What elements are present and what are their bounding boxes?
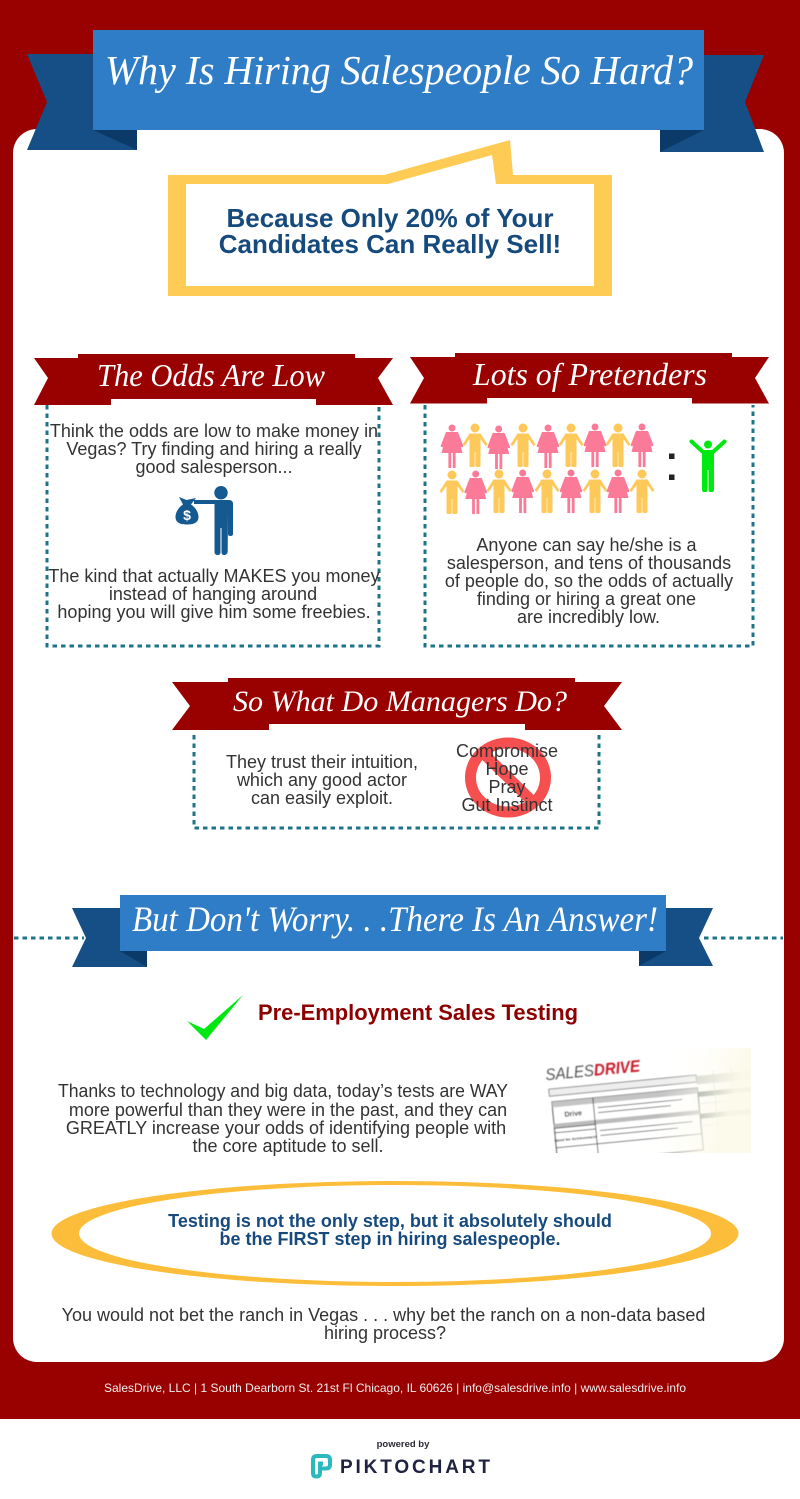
piktochart branding <box>313 1439 490 1478</box>
callout text: be the FIRST step in hiring salespeople. <box>219 1229 561 1249</box>
answer ribbon: But Don't Worry. . .There Is An Answer! <box>132 899 658 939</box>
callout: oval <box>51 1181 739 1286</box>
text block: bet the ranch: hiring process? <box>324 1323 446 1343</box>
callout text: Candidates Can Really Sell! <box>219 229 561 259</box>
colon <box>669 454 674 480</box>
text block: anyone can say: of people do, so the odds of actually <box>445 571 733 591</box>
text block: crossed out methods: Hope <box>485 759 529 779</box>
icon: green check mark <box>187 995 243 1040</box>
text block: crossed out methods: Pray <box>488 777 526 797</box>
text block: crossed out methods: Gut Instinct <box>461 795 553 815</box>
text block: intuition: can easily exploit. <box>251 788 393 808</box>
text block: technology and big data: the core aptitude to sell. <box>192 1136 384 1156</box>
icon: man holding money bag: $ <box>183 507 191 523</box>
icon: green real salesperson <box>692 440 724 492</box>
icon: prohibition sign <box>470 743 546 812</box>
heading ribbon <box>172 678 622 730</box>
text block: anyone can say: Anyone can say he/she is a <box>476 535 698 555</box>
text block: anyone can say: salesperson, and tens of thousands <box>447 553 731 573</box>
text block: anyone can say: finding or hiring a great one <box>477 589 696 609</box>
callout text: Because Only 20% of Your <box>226 203 554 233</box>
text block: bet the ranch: You would not bet the ranch in Vegas . . . why bet the ranch on a non-data based <box>62 1305 705 1325</box>
heading ribbon: So What Do Managers Do? <box>233 685 567 718</box>
heading ribbon <box>34 354 393 405</box>
text block: technology and big data: GREATLY increase your odds of identifying people with <box>66 1118 506 1138</box>
panel: what managers do <box>172 678 622 828</box>
pictogram: second row of pretenders <box>440 470 654 514</box>
image: sales test report: Need for Achievement <box>554 1134 597 1143</box>
subheading: pre-employment sales testing: Pre-Employment Sales Testing <box>258 1000 578 1025</box>
text block: makes you money: instead of hanging around <box>109 584 317 604</box>
heading ribbon <box>410 353 769 404</box>
answer ribbon <box>72 895 713 967</box>
text block: makes you money: hoping you will give him some freebies. <box>57 602 371 622</box>
heading ribbon: Lots of Pretenders <box>472 356 707 392</box>
pictogram: row of pretenders <box>442 424 652 469</box>
wordmark: PIKTOCHART <box>340 1457 490 1478</box>
text block: anyone can say: are incredibly low. <box>517 607 660 627</box>
panel: lots of pretenders <box>410 353 769 646</box>
title: Why Is Hiring Salespeople So Hard? <box>105 47 693 93</box>
callout: speech bubble <box>168 140 612 296</box>
text block: intuition: They trust their intuition, <box>226 752 418 772</box>
image: sales test report <box>546 1048 751 1153</box>
text block: vegas odds: good salesperson... <box>135 457 293 477</box>
title ribbon <box>27 30 764 152</box>
piktochart branding: powered by <box>377 1439 430 1450</box>
image: sales test report: Drive <box>564 1110 582 1119</box>
callout text: Testing is not the only step, but it absolutely should <box>168 1211 612 1231</box>
panel: the odds are low <box>34 354 393 646</box>
icon: man holding money bag <box>176 486 233 555</box>
footer contact line: SalesDrive, LLC | 1 South Dearborn St. 21st Fl Chicago, IL 60626 | info@salesdrive.info | www.salesdrive.info <box>104 1381 686 1395</box>
text block: intuition: which any good actor <box>236 770 407 790</box>
white content panel <box>13 129 784 1362</box>
text block: crossed out methods: Compromise <box>456 741 558 761</box>
text block: technology and big data: more powerful than they were in the past, and they can <box>69 1100 507 1120</box>
icon: piktochart logo <box>313 1456 330 1476</box>
text block: vegas odds: Think the odds are low to make money in <box>50 421 378 441</box>
image: sales test report: SALESDRIVE <box>545 1057 642 1084</box>
heading ribbon: The Odds Are Low <box>97 357 326 393</box>
text block: vegas odds: Vegas? Try finding and hiring a really <box>66 439 362 459</box>
text block: technology and big data: Thanks to technology and big data, today’s tests are WAY <box>58 1081 508 1101</box>
text block: makes you money: The kind that actually MAKES you money <box>48 566 380 586</box>
